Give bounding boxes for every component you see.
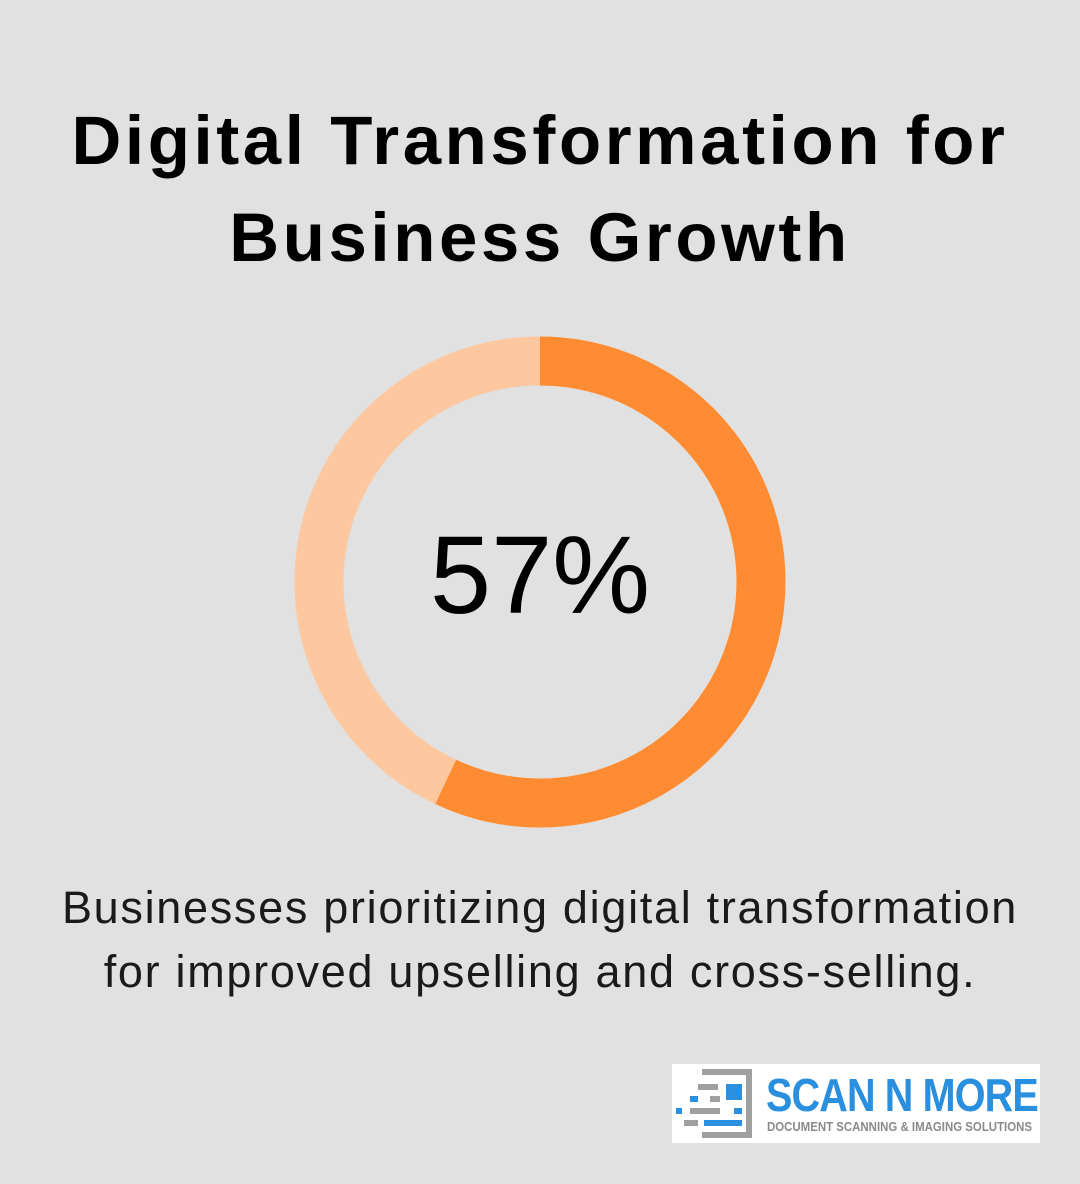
icon: scan	[676, 1069, 752, 1138]
logo: DOCUMENT SCANNING & IMAGING SOLUTIONS	[767, 1119, 1032, 1134]
donut chart: 57%	[430, 514, 650, 637]
logo: SCAN N MORE	[766, 1069, 1038, 1121]
title: Digital Transformation for	[72, 102, 1008, 179]
logo	[672, 1064, 1040, 1143]
description: for improved upselling and cross-selling.	[104, 946, 976, 997]
title: Business Growth	[229, 199, 851, 276]
description	[62, 882, 1018, 997]
description: Businesses prioritizing digital transformation	[62, 882, 1018, 933]
title	[72, 102, 1008, 276]
